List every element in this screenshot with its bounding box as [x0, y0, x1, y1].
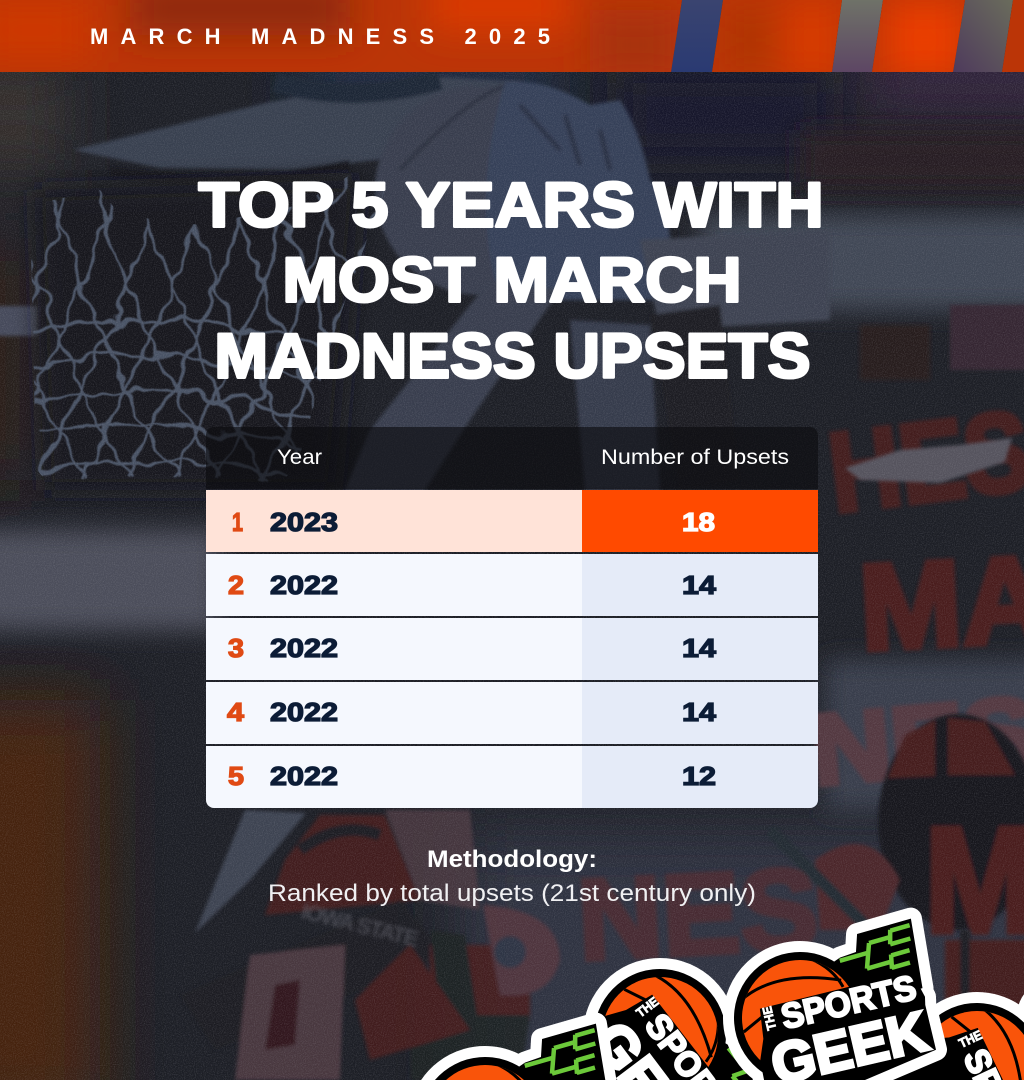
- table header: [206, 427, 818, 489]
- sticker pile: [421, 908, 1024, 1080]
- logo wordmark: THE: [759, 1005, 779, 1032]
- row 4: 14: [682, 697, 717, 727]
- orange stripes: [0, 0, 1024, 80]
- row 3: 14: [682, 633, 717, 663]
- row 3: [206, 618, 818, 680]
- dark navy top area: [620, 70, 830, 160]
- title: TOP 5 YEARS WITH: [198, 170, 824, 240]
- sticker: right, rotated: THE: [956, 1027, 985, 1051]
- table header: Number of Upsets: [601, 445, 789, 469]
- sticker: centre, rotated: [586, 958, 753, 1080]
- basketball and hands: [375, 81, 670, 300]
- basketball net: [31, 176, 384, 482]
- jersey with collar and lettering, lower centre: [180, 810, 560, 1080]
- sticker: right, rotated: [893, 992, 1024, 1080]
- row 2: 2: [228, 570, 244, 600]
- icon: basketball: [742, 960, 849, 1060]
- sticker: bottom left: [403, 1023, 632, 1080]
- title: [198, 170, 824, 392]
- backboard and rim: [0, 76, 520, 336]
- row 4: 4: [227, 697, 245, 727]
- row 1: 1: [232, 507, 243, 537]
- red jersey lettering, right side: NES: [807, 676, 1024, 807]
- title: MOST MARCH: [282, 246, 742, 316]
- far right sticker edge: [1016, 980, 1024, 1060]
- methodology note: Ranked by total upsets (21st century only): [268, 880, 756, 907]
- row 2: [206, 554, 818, 616]
- row 1: 2023: [270, 507, 338, 537]
- row 4: 2022: [270, 697, 338, 727]
- gray band left of table: [0, 530, 220, 630]
- jersey team name: IOWA STATE: [299, 899, 421, 952]
- row 3: 2022: [270, 633, 338, 663]
- logo wordmark: [758, 968, 933, 1080]
- row 5: 5: [228, 761, 244, 791]
- icon: green tournament bracket: [835, 924, 920, 982]
- stripe gaps: [671, 0, 1013, 72]
- player arm and wrist: [345, 230, 830, 490]
- row 2: 2022: [270, 570, 338, 600]
- red jersey lettering, right side: [807, 305, 1024, 807]
- row 2: 14: [682, 570, 717, 600]
- dark space behind the net: [34, 180, 360, 490]
- row 5: [206, 746, 818, 808]
- header band with slanted stripes: [0, 0, 1024, 72]
- dark red band upper right: [800, 130, 1024, 190]
- methodology note: Methodology:: [427, 846, 597, 873]
- title: MADNESS UPSETS: [214, 322, 810, 392]
- logo wordmark: SPORTS: [778, 968, 920, 1037]
- pale arm streak across letters: [845, 438, 1012, 483]
- dark oval on jersey: [878, 714, 1024, 964]
- row 1: 18: [682, 507, 715, 537]
- row 1: [206, 490, 818, 552]
- row 5: 12: [682, 761, 716, 791]
- gray band lower right: [825, 660, 1024, 810]
- table header: Year: [277, 445, 322, 469]
- row 5: 2022: [270, 761, 338, 791]
- row 4: [206, 682, 818, 744]
- gray band right of title: [700, 215, 1024, 310]
- lower right jersey shapes: [575, 830, 1024, 1020]
- sticker: front centre: [718, 918, 954, 1080]
- row 3: 3: [228, 633, 244, 663]
- lower right jersey shapes: NES: [575, 845, 821, 985]
- header label: MARCH MADNESS 2025: [90, 24, 550, 49]
- sticker: centre, rotated: THE: [633, 994, 662, 1020]
